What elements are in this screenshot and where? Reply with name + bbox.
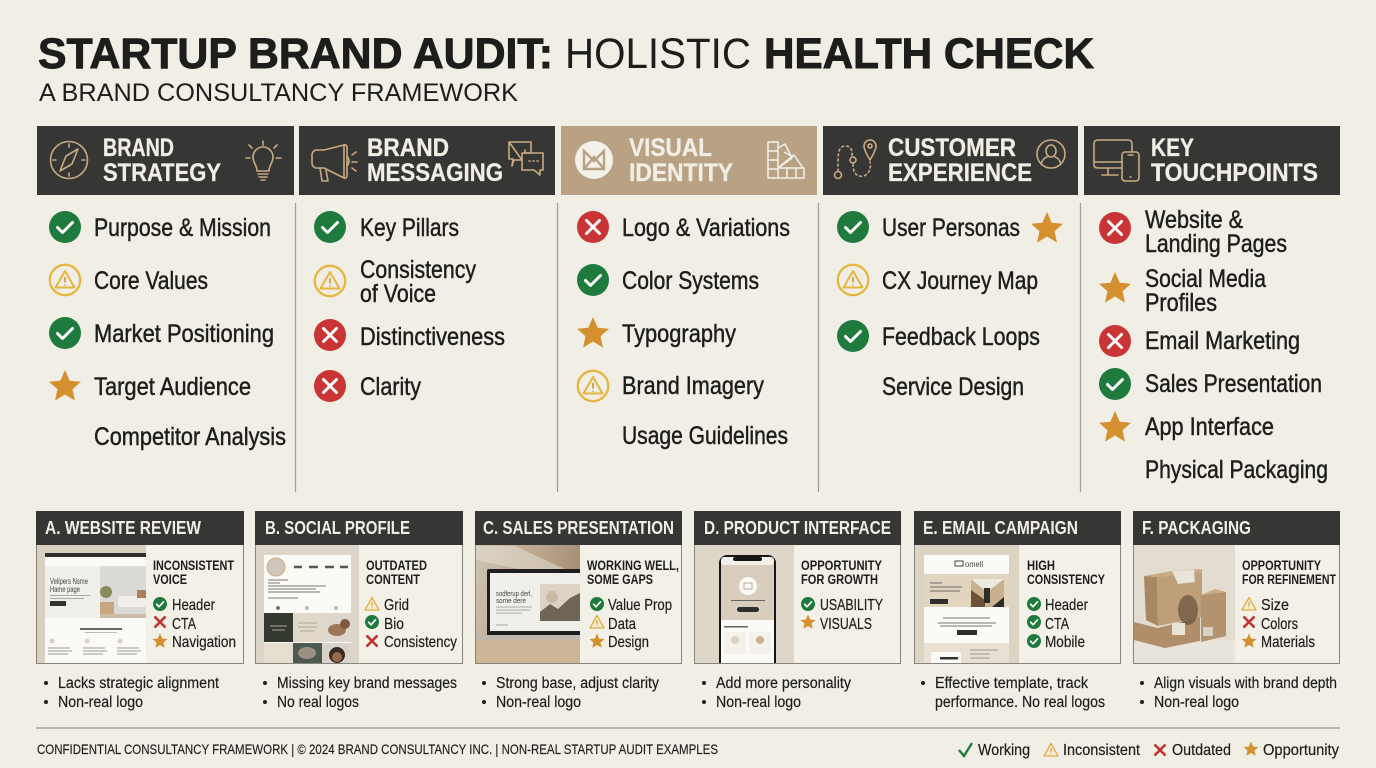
title: HOLISTIC: [565, 30, 751, 78]
notes: sales presentation: Non-real logo: [496, 694, 581, 711]
card verdict: OUTDATED: [366, 558, 427, 573]
item: physical packaging: Physical Packaging: [1145, 456, 1328, 484]
notes: sales presentation: Strong base, adjust clarity: [496, 675, 659, 692]
item: feedback loops: Feedback Loops: [882, 323, 1040, 351]
item: usage guidelines: Usage Guidelines: [622, 422, 788, 450]
status: color systems: [577, 264, 609, 296]
card checklist: Colors: [1261, 616, 1298, 633]
notes: social profile: [263, 675, 457, 711]
notes: sales presentation: [482, 675, 659, 711]
icon: star opportunity: [1031, 212, 1063, 243]
status: distinctiveness: [314, 319, 346, 351]
card verdict: HIGH: [1027, 558, 1055, 573]
card header: D. PRODUCT INTERFACE: [704, 518, 891, 538]
card verdict: SOME GAPS: [587, 572, 653, 587]
card checklist: Value Prop: [608, 597, 672, 614]
item: service design: Service Design: [882, 373, 1024, 401]
item: purpose & mission: Purpose & Mission: [94, 214, 271, 242]
item: email marketing: Email Marketing: [1145, 327, 1300, 355]
card header: E. EMAIL CAMPAIGN: [923, 518, 1078, 538]
icon: brand mark: [575, 141, 613, 179]
panel: visual identity: [561, 126, 817, 450]
header: customer experience: [823, 126, 1078, 195]
status: brand imagery: [578, 371, 608, 401]
mockup: website: Hame page: [50, 585, 80, 594]
item: website & landing pages: [1145, 206, 1287, 258]
item: website & landing pages: Website &: [1145, 206, 1243, 234]
status: target audience: [49, 370, 81, 401]
card: packaging: [1133, 511, 1340, 664]
card header: B. SOCIAL PROFILE: [265, 518, 410, 538]
status: purpose & mission: [49, 211, 81, 243]
legend: Outdated: [1172, 742, 1231, 759]
legend: Inconsistent: [1063, 742, 1140, 759]
header: customer experience: CUSTOMER: [888, 134, 1016, 162]
card checklist: CTA: [1045, 616, 1069, 633]
status: app interface: [1099, 411, 1131, 442]
icon: devices: [1094, 140, 1139, 181]
item: sales presentation: Sales Presentation: [1145, 370, 1322, 398]
status: email marketing: [1099, 325, 1131, 357]
notes: product interface: [702, 675, 851, 711]
subtitle: A BRAND CONSULTANCY FRAMEWORK: [39, 79, 518, 107]
header: brand strategy: [37, 126, 294, 195]
card checklist: USABILITY: [820, 597, 883, 614]
item: target audience: Target Audience: [94, 373, 251, 401]
legend: Working: [978, 742, 1030, 759]
card verdict: [801, 558, 882, 587]
title: HEALTH CHECK: [764, 30, 1094, 78]
notes: social profile: Missing key brand messages: [277, 675, 457, 692]
item: consistency of voice: Consistency: [360, 256, 476, 284]
card checklist: [800, 597, 883, 633]
status: consistency of voice: [315, 266, 345, 296]
item: user personas: User Personas: [882, 214, 1020, 242]
status: user personas: [837, 211, 869, 243]
item: clarity: Clarity: [360, 373, 421, 401]
item: key pillars: Key Pillars: [360, 214, 459, 242]
item: website & landing pages: Landing Pages: [1145, 230, 1287, 258]
status: sales presentation: [1099, 368, 1131, 400]
card verdict: [1242, 558, 1337, 587]
notes: website review: Non-real logo: [58, 694, 143, 711]
card checklist: Design: [608, 634, 649, 651]
mockup: boxes: [1134, 545, 1235, 663]
panel: brand strategy: [37, 126, 294, 451]
header: visual identity: IDENTITY: [629, 159, 733, 187]
mockup: laptop: [476, 545, 580, 663]
icon: light bulb: [246, 141, 281, 180]
item: consistency of voice: of Voice: [360, 280, 436, 308]
mockup: email: [915, 545, 1019, 663]
card verdict: [587, 558, 679, 587]
card checklist: Size: [1261, 597, 1289, 614]
icon: journey map: [834, 140, 876, 178]
panel: brand messaging: [299, 126, 555, 402]
header: brand messaging: BRAND: [367, 134, 449, 162]
notes: website review: [44, 675, 220, 711]
header: key touchpoints: TOUCHPOINTS: [1151, 159, 1318, 187]
card checklist: Header: [1045, 597, 1089, 614]
notes: social profile: No real logos: [277, 694, 359, 711]
card header: [914, 511, 1121, 545]
notes: product interface: Non-real logo: [716, 694, 801, 711]
item: color systems: Color Systems: [622, 267, 759, 295]
item: consistency of voice: [360, 256, 476, 308]
card header: A. WEBSITE REVIEW: [45, 518, 201, 538]
item: app interface: App Interface: [1145, 413, 1274, 441]
header: brand messaging: MESSAGING: [367, 159, 503, 187]
notes: product interface: Add more personality: [716, 675, 851, 692]
card checklist: Header: [172, 597, 216, 614]
notes: packaging: Non-real logo: [1154, 694, 1239, 711]
icon: compass: [50, 142, 88, 178]
notes: email campaign: performance. No real logos: [935, 694, 1105, 711]
card verdict: VOICE: [153, 572, 187, 587]
status: feedback loops: [837, 320, 869, 352]
card checklist: [1242, 597, 1315, 651]
item: social media profiles: Profiles: [1145, 289, 1217, 317]
status: clarity: [314, 370, 346, 402]
icon: colour swatches: [768, 142, 804, 178]
header: key touchpoints: KEY: [1151, 134, 1194, 162]
title: [38, 30, 1094, 78]
status: website: [1099, 212, 1131, 244]
item: social media profiles: [1145, 265, 1266, 317]
header: brand strategy: STRATEGY: [103, 159, 221, 187]
legend: Opportunity: [1263, 742, 1339, 759]
card header: F. PACKAGING: [1142, 518, 1251, 538]
card verdict: FOR REFINEMENT: [1242, 572, 1337, 587]
card checklist: VISUALS: [820, 616, 872, 633]
notes: website review: Lacks strategic alignment: [58, 675, 220, 692]
status: social media: [1099, 272, 1131, 303]
legend: [959, 742, 1339, 759]
card verdict: WORKING WELL,: [587, 558, 679, 573]
title: STARTUP BRAND AUDIT:: [38, 30, 553, 78]
header: brand messaging: [299, 126, 555, 195]
card checklist: [365, 597, 457, 651]
card checklist: Grid: [384, 597, 409, 614]
card verdict: CONSISTENCY: [1027, 572, 1105, 587]
card: sales presentation: [475, 511, 682, 664]
card verdict: OPPORTUNITY: [1242, 558, 1321, 573]
icon: megaphone: [312, 145, 357, 181]
card verdict: OPPORTUNITY: [801, 558, 882, 573]
card checklist: [590, 597, 672, 651]
status: logo & variations: [577, 211, 609, 243]
card header: [475, 511, 682, 545]
notes: packaging: Align visuals with brand depth: [1154, 675, 1337, 692]
card checklist: Consistency: [384, 634, 457, 651]
card: social profile: [255, 511, 463, 664]
mockup: laptop: some dere: [496, 598, 526, 605]
item: market positioning: Market Positioning: [94, 320, 274, 348]
mockup: website: Velipers Nsme: [50, 577, 88, 586]
item: brand imagery: Brand Imagery: [622, 372, 764, 400]
status: cx journey map: [838, 265, 868, 295]
card checklist: Bio: [384, 616, 404, 633]
card checklist: [1027, 597, 1089, 651]
panel: key touchpoints: [1084, 126, 1340, 484]
notes: email campaign: [921, 675, 1105, 711]
card checklist: Mobile: [1045, 634, 1085, 651]
item: competitor analysis: Competitor Analysis: [94, 423, 286, 451]
card header: [694, 511, 901, 545]
item: social media profiles: Social Media: [1145, 265, 1266, 293]
card header: [1133, 511, 1340, 545]
card checklist: [152, 597, 236, 651]
card: website review: [36, 511, 244, 664]
footer note: CONFIDENTIAL CONSULTANCY FRAMEWORK | © 2024 BRAND CONSULTANCY INC. | NON-REAL STARTUP AUDIT EXAMPLES: [37, 741, 718, 757]
card verdict: INCONSISTENT: [153, 558, 235, 573]
panel: customer experience: [823, 126, 1078, 401]
card checklist: Navigation: [172, 634, 236, 651]
mockup: laptop: sodferup derl,: [496, 591, 532, 598]
notes: email campaign: Effective template, track: [935, 675, 1088, 692]
item: core values: Core Values: [94, 267, 208, 295]
item: cx journey map: CX Journey Map: [882, 267, 1038, 295]
notes: packaging: [1140, 675, 1337, 711]
mockup: website: [37, 545, 146, 663]
card verdict: FOR GROWTH: [801, 572, 878, 587]
header: key touchpoints: [1084, 126, 1340, 195]
card verdict: [153, 558, 235, 587]
header: visual identity: VISUAL: [629, 134, 712, 162]
item: logo & variations: Logo & Variations: [622, 214, 790, 242]
card: product interface: [694, 511, 901, 675]
card checklist: CTA: [172, 616, 196, 633]
mockup: social profile: [256, 545, 359, 663]
item: typography: Typography: [622, 320, 736, 348]
item: distinctiveness: Distinctiveness: [360, 323, 505, 351]
card: email campaign: [914, 511, 1121, 664]
card header: C. SALES PRESENTATION: [483, 518, 674, 538]
icon: chat bubbles: [509, 142, 543, 175]
card verdict: [366, 558, 427, 587]
card checklist: Materials: [1261, 634, 1315, 651]
header: visual identity: [561, 126, 817, 195]
status: typography: [577, 317, 609, 348]
mockup: email: omell: [965, 560, 983, 569]
card verdict: CONTENT: [366, 572, 421, 587]
card verdict: [1027, 558, 1105, 587]
status: core values: [50, 265, 80, 295]
status: key pillars: [314, 211, 346, 243]
card header: [255, 511, 463, 545]
mockup: phone: [695, 545, 794, 663]
status: market positioning: [49, 317, 81, 349]
card checklist: Data: [608, 616, 636, 633]
header: customer experience: EXPERIENCE: [888, 159, 1032, 187]
card header: [36, 511, 244, 545]
header: brand strategy: BRAND: [103, 134, 174, 162]
icon: person: [1037, 140, 1065, 168]
